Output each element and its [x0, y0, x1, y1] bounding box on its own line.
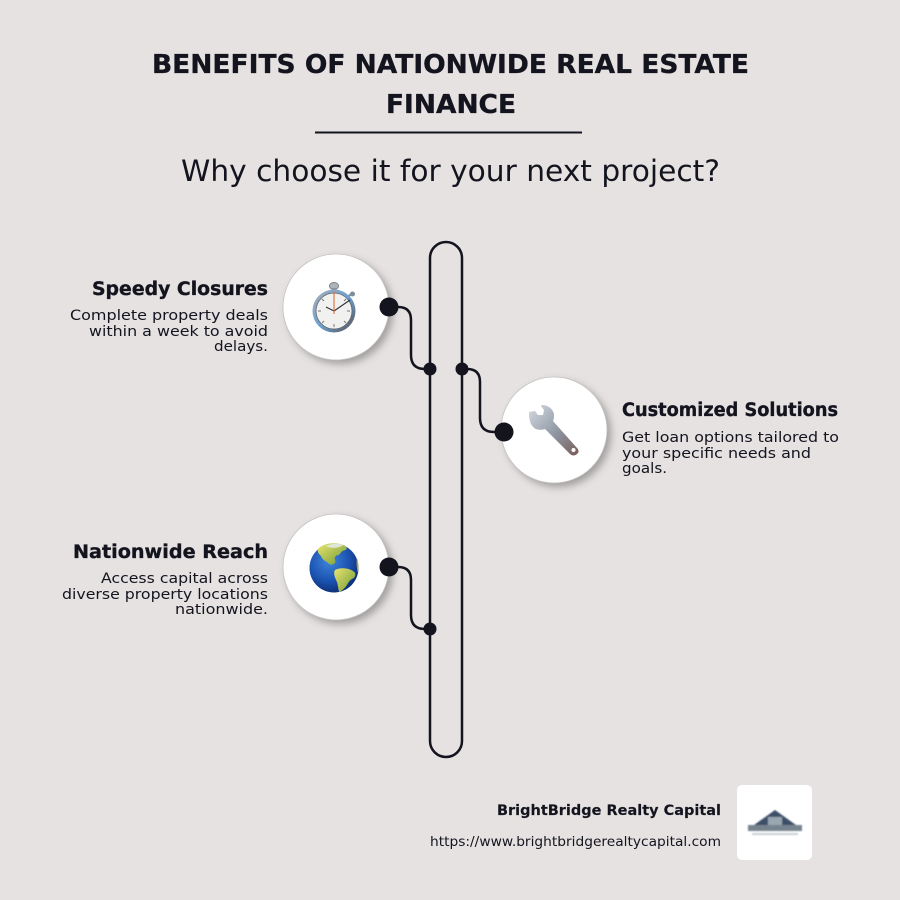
footer brand name: BrightBridge Realty Capital [497, 803, 721, 819]
logo [737, 785, 812, 860]
description: diverse property locations [62, 587, 268, 603]
icon circle: stopwatch [283, 254, 393, 364]
description: Access capital across [101, 571, 268, 587]
heading: Nationwide Reach [73, 542, 268, 563]
node [380, 558, 398, 576]
title underline [315, 132, 582, 134]
description: goals. [622, 461, 667, 477]
junction [456, 362, 468, 376]
icon circle: wrench [501, 377, 611, 487]
heading: Customized Solutions [622, 400, 838, 421]
description: within a week to avoid [89, 324, 268, 340]
central capsule track [430, 242, 462, 757]
description: Get loan options tailored to [622, 430, 839, 446]
junction [424, 622, 436, 636]
title: FINANCE [386, 90, 516, 120]
footer url: https://www.brightbridgerealtycapital.com [430, 834, 721, 850]
connector [389, 567, 430, 629]
node [494, 422, 514, 442]
panel: speedy closures [70, 254, 436, 376]
connector [389, 307, 430, 369]
connector [462, 369, 504, 432]
description: your specific needs and [622, 446, 811, 462]
panel: nationwide reach [62, 514, 436, 636]
description [70, 308, 268, 355]
heading: Speedy Closures [92, 279, 268, 300]
title [152, 50, 749, 120]
subtitle: Why choose it for your next project? [181, 154, 720, 188]
panel: customized solutions [456, 362, 839, 487]
description [62, 571, 268, 618]
description [622, 430, 839, 477]
description: delays. [214, 339, 268, 355]
description: Complete property deals [70, 308, 268, 324]
junction [424, 362, 436, 376]
node [380, 298, 398, 316]
title: BENEFITS OF NATIONWIDE REAL ESTATE [152, 50, 749, 80]
description: nationwide. [175, 602, 268, 618]
icon circle: globe [283, 514, 393, 624]
